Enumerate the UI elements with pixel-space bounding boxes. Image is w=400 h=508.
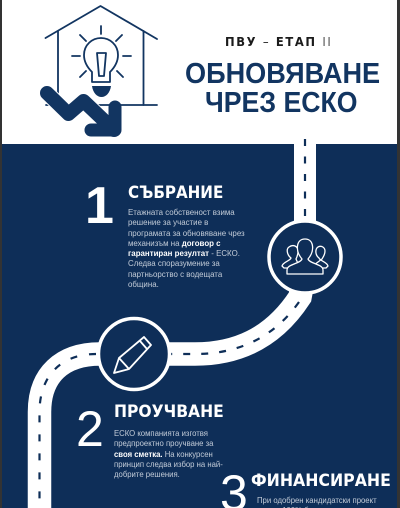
step 1 text: партньорство с водещата	[128, 269, 222, 279]
step 1 text: Следва споразумение за	[128, 258, 220, 268]
icon: people in circle	[269, 221, 341, 293]
step 2 text: предпроектно проучване за	[114, 438, 213, 448]
right edge strip	[397, 0, 400, 508]
step 1 text: механизъм на договор с	[128, 238, 221, 248]
title	[185, 58, 380, 119]
step 1 text: гарантиран резултат - ЕСКО.	[128, 248, 240, 258]
left edge strip	[0, 0, 2, 508]
step 1 text	[128, 207, 245, 289]
step 3 heading: ФИНАНСИРАНЕ	[251, 471, 391, 491]
step 2 heading: ПРОУЧВАНЕ	[114, 402, 224, 422]
title: ОБНОВЯВАНЕ	[185, 58, 380, 90]
step 1 heading: СЪБРАНИЕ	[128, 183, 223, 203]
step 2 text: принцип следва избор на най-	[114, 459, 223, 469]
step 1 number: 1	[85, 177, 114, 235]
icon: pencil in circle	[98, 318, 170, 390]
step 2 number: 2	[76, 401, 104, 457]
step 2 text: своя сметка. На конкурсен	[114, 449, 213, 459]
step 3 text: При одобрен кандидатски проект	[257, 495, 377, 505]
title: ЧРЕЗ ЕСКО	[205, 87, 358, 119]
step 2 text: ЕСКО компанията изготвя	[114, 428, 208, 438]
step 1 text: Етажната собственост взима	[128, 207, 235, 217]
icon: house with light bulb and down arrow	[40, 5, 158, 137]
step 2 text	[114, 428, 223, 479]
step 1 text: община.	[128, 279, 159, 289]
step 1 text: програмата за обновяване чрез	[128, 228, 245, 238]
subtitle: ПВУ – ЕТАП II	[225, 35, 332, 49]
panel: navy background	[0, 144, 400, 508]
step 2 text: добрите решения.	[114, 469, 180, 479]
step 1 text: решение за участие в	[128, 217, 208, 227]
